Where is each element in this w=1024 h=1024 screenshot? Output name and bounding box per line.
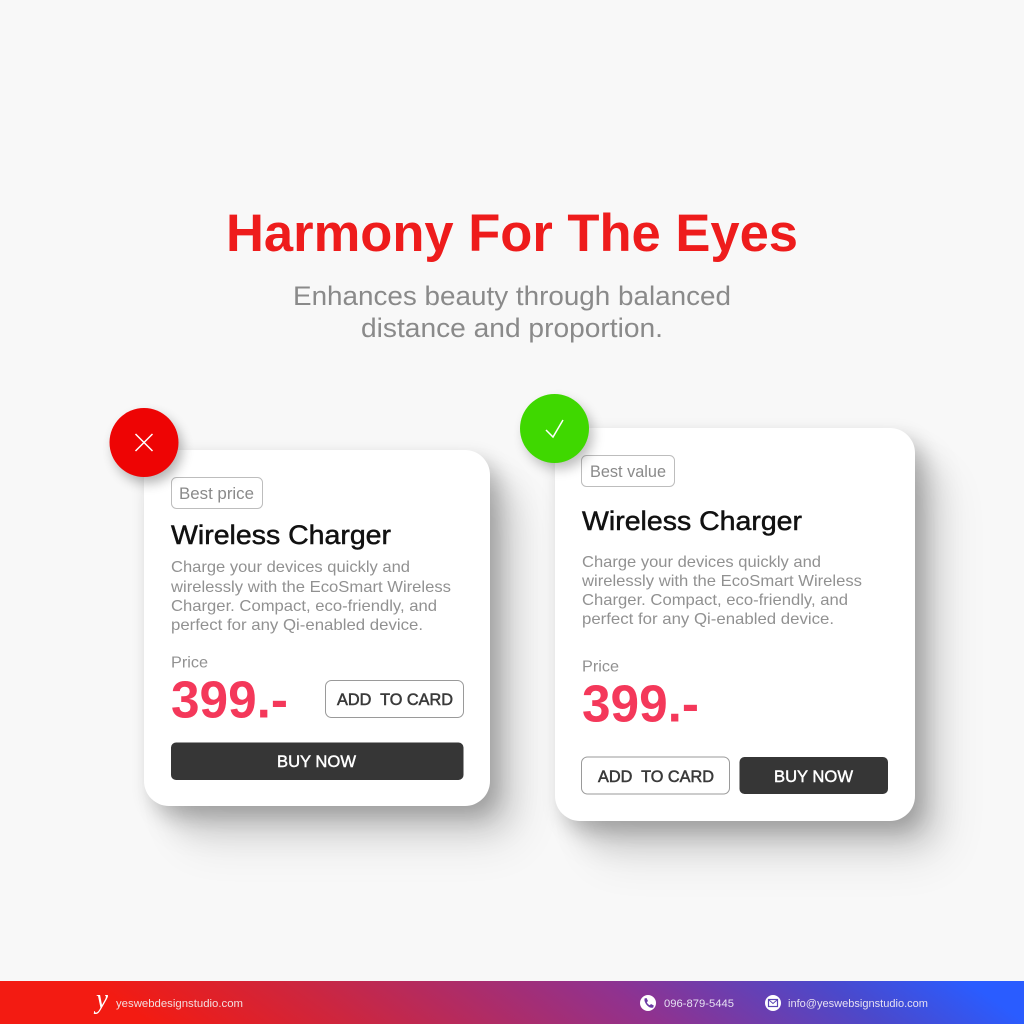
subtitle: distance and proportion. (361, 313, 663, 343)
button: add to card: ADD TO CARD (337, 690, 453, 709)
description: Charger. Compact, eco-friendly, and (582, 592, 848, 609)
badge: best price: Best price (179, 484, 254, 503)
price label: Price (582, 658, 619, 676)
price value: 399.- (582, 676, 699, 734)
product name: Wireless Charger (582, 506, 802, 536)
icon: mail (765, 995, 781, 1011)
description: perfect for any Qi-enabled device. (171, 617, 423, 634)
card body right (555, 428, 915, 821)
icon: phone (640, 995, 656, 1011)
email: info@yeswebsignstudio.com (788, 998, 928, 1010)
button: add to card (326, 680, 464, 718)
subtitle (293, 281, 731, 343)
phone number: 096-879-5445 (664, 998, 734, 1010)
description: Charge your devices quickly and (171, 559, 410, 576)
footer bar (0, 981, 1024, 1024)
panel: good example card (520, 394, 949, 863)
logo mark: y (93, 984, 109, 1015)
description: Charge your devices quickly and (582, 554, 821, 571)
badge: best value (582, 456, 674, 486)
website: yeswebdesignstudio.com (116, 998, 243, 1010)
description: wirelessly with the EcoSmart Wireless (170, 579, 451, 596)
title: Harmony For The Eyes (226, 204, 798, 263)
description (581, 554, 862, 628)
card body left (144, 450, 490, 806)
product name: Wireless Charger (171, 520, 391, 550)
price label: Price (171, 654, 208, 672)
button: buy now (171, 742, 464, 780)
panel: bad example card (110, 408, 524, 848)
description: wirelessly with the EcoSmart Wireless (581, 573, 862, 590)
button: buy now: BUY NOW (774, 767, 853, 786)
price value: 399.- (171, 672, 288, 730)
subtitle: Enhances beauty through balanced (293, 281, 731, 311)
card shadow right (562, 437, 949, 863)
button: buy now (740, 757, 888, 794)
description: Charger. Compact, eco-friendly, and (171, 598, 437, 615)
button: buy now: BUY NOW (277, 752, 356, 771)
badge: best value: Best value (590, 462, 666, 481)
icon: red cross badge (110, 408, 182, 483)
description (170, 559, 451, 634)
description: perfect for any Qi-enabled device. (582, 611, 834, 628)
icon: green check badge (520, 394, 593, 469)
card shadow left (151, 459, 524, 848)
button: add to card: ADD TO CARD (598, 767, 714, 786)
badge: best price (172, 478, 262, 508)
button: add to card (582, 757, 730, 794)
